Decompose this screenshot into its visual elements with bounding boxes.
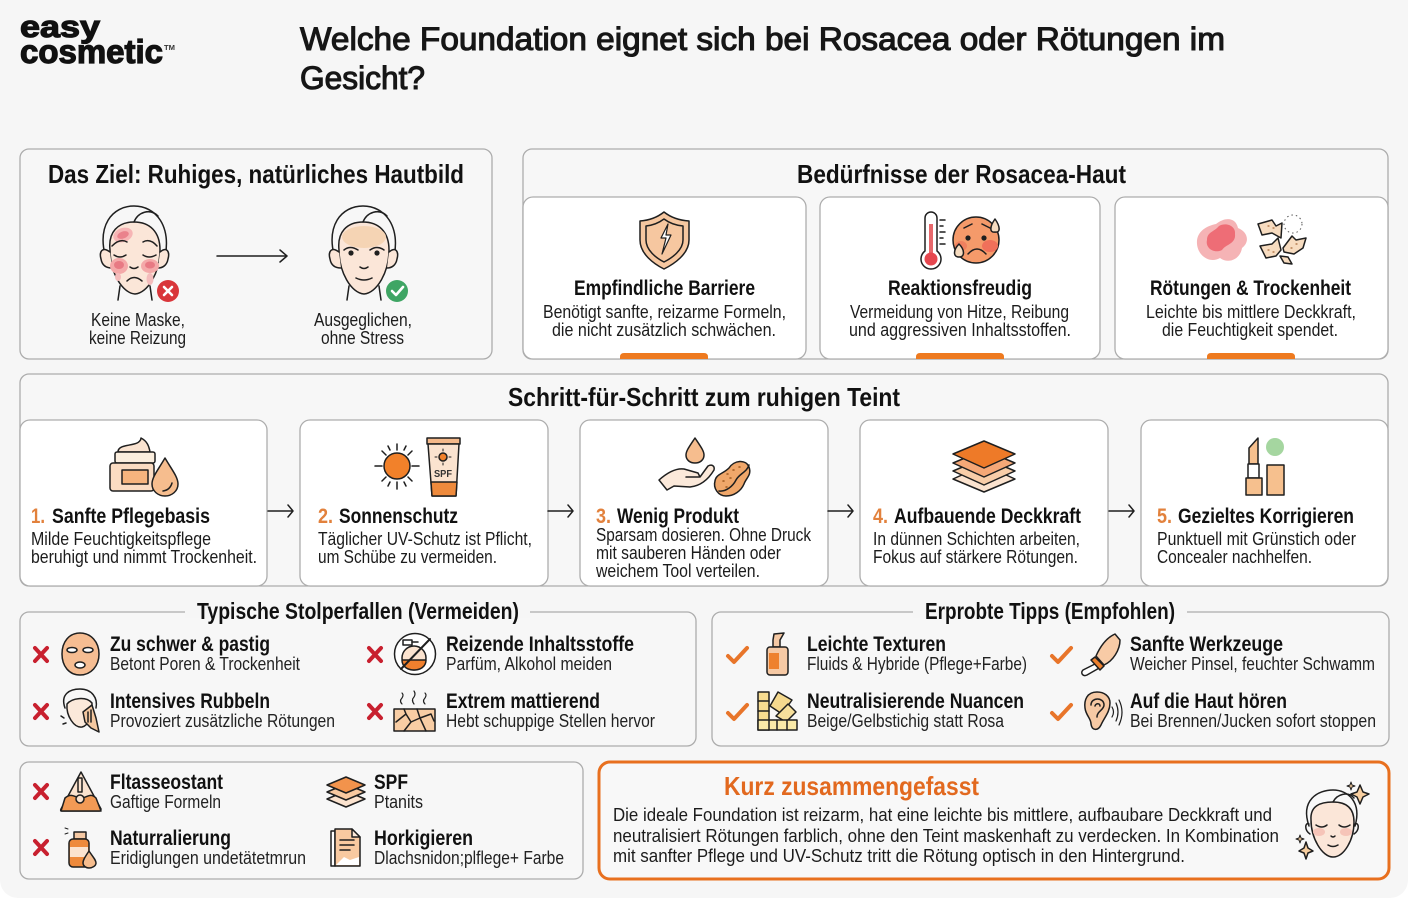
caption: no mask xyxy=(89,310,186,348)
step text: Sparsam dosieren. Ohne Druck xyxy=(596,525,812,545)
icon: concealer and green dot xyxy=(1246,438,1284,495)
card text: Benötigt sanfte, reizarme Formeln, xyxy=(543,302,786,322)
tip: listen to the skin xyxy=(1052,690,1376,731)
pitfall: too heavy: Zu schwer & pastig xyxy=(110,633,270,656)
icon: calm face xyxy=(329,206,398,300)
step text: Täglicher UV-Schutz ist Pflicht, xyxy=(318,529,532,549)
step text: Punktuell mit Grünstich oder xyxy=(1157,529,1356,549)
pitfall: too heavy xyxy=(35,633,300,675)
icon: flushed sweating face xyxy=(953,217,999,263)
tip: light textures: Fluids & Hybride (Pflege+Farbe) xyxy=(807,654,1027,674)
card text: Vermeidung von Hitze, Reibung xyxy=(850,302,1069,322)
card: sensitive barrier xyxy=(523,197,806,359)
step text: Fokus auf stärkere Rötungen. xyxy=(873,547,1078,567)
pitfall: too heavy: Betont Poren & Trockenheit xyxy=(110,654,300,674)
card: step 4 xyxy=(860,420,1108,586)
step text: 4. xyxy=(873,505,888,528)
step text: weichem Tool verteilen. xyxy=(595,561,760,581)
step text: Wenig Produkt xyxy=(617,505,739,528)
item: naturalising: Eridiglungen undetätetmrun xyxy=(110,848,306,868)
item: document: Dlachsnidon;plflege+ Farbe xyxy=(374,848,564,868)
step text: Sonnenschutz xyxy=(339,505,458,528)
card text: Reaktionsfreudig xyxy=(888,277,1032,300)
item: SPF layers xyxy=(327,771,423,812)
title xyxy=(300,21,1225,96)
card text xyxy=(849,277,1071,340)
step text: Sanfte Pflegebasis xyxy=(52,505,210,528)
step text xyxy=(318,505,532,567)
arrow: step 2 to 3 xyxy=(548,505,573,517)
pitfall: extreme matte: Extrem mattierend xyxy=(446,690,600,713)
tip: listen to the skin: Auf die Haut hören xyxy=(1130,690,1287,713)
logo: easy cosmetic xyxy=(20,9,175,70)
pitfall: extreme matte: Hebt schuppige Stellen hervor xyxy=(446,711,655,731)
icon: thermometer xyxy=(921,212,945,269)
card text: die Feuchtigkeit spendet. xyxy=(1162,320,1338,340)
arrow: step 3 to 4 xyxy=(828,505,853,517)
logo: easy cosmetic: easy xyxy=(20,9,101,44)
step text: 1. xyxy=(31,505,45,528)
card: step 2 xyxy=(300,420,548,586)
tip: neutralising shades xyxy=(728,690,1024,731)
pitfall: irritating ingredients: Parfüm, Alkohol meiden xyxy=(446,654,612,674)
card: redness and dryness xyxy=(1115,197,1388,359)
step text xyxy=(873,505,1081,567)
heading: goal: Das Ziel: Ruhiges, natürliches Hautbild xyxy=(48,159,464,189)
step text: um Schübe zu vermeiden. xyxy=(318,547,497,567)
card: step 5 xyxy=(1141,420,1388,586)
summary text xyxy=(613,805,1279,866)
step text xyxy=(1157,505,1356,567)
pitfall: rubbing: Provoziert zusätzliche Rötungen xyxy=(110,711,335,731)
icon: drop above hand xyxy=(659,438,714,490)
icon: sun xyxy=(375,444,419,489)
heading: summary: Kurz zusammengefasst xyxy=(724,771,979,801)
arrow: before to after xyxy=(217,250,287,262)
tip: listen to the skin: Bei Brennen/Jucken sofort stoppen xyxy=(1130,711,1376,731)
step text: Aufbauende Deckkraft xyxy=(894,505,1081,528)
icon: redness patch xyxy=(1197,219,1247,261)
panel: needs of rosacea skin xyxy=(523,149,1388,359)
item: document xyxy=(331,827,564,868)
icon: green check badge xyxy=(386,280,408,302)
summary text: neutralisiert Rötungen farblich, ohne den Teint maskenhaft zu verdecken. In Kombination xyxy=(613,826,1279,846)
heading: steps: Schritt-für-Schritt zum ruhigen Teint xyxy=(508,382,900,412)
item: naturalising: Naturralierung xyxy=(110,827,231,850)
caption: balanced: Ausgeglichen, xyxy=(314,310,412,330)
icon: irritated face xyxy=(100,206,169,300)
panel: summary xyxy=(599,762,1389,879)
item: document: Horkigieren xyxy=(374,827,473,850)
title: Welche Foundation eignet sich bei Rosacea oder Rötungen im xyxy=(300,21,1225,57)
icon: red cross badge xyxy=(157,280,179,302)
title: Gesicht? xyxy=(300,60,425,96)
card text xyxy=(543,277,786,340)
item: SPF layers: SPF xyxy=(374,771,408,794)
card: step 1 xyxy=(20,420,267,586)
step text: 5. xyxy=(1157,505,1172,528)
item: warning formula: Fltasseostant xyxy=(110,771,223,794)
step text: In dünnen Schichten arbeiten, xyxy=(873,529,1080,549)
panel: tips xyxy=(712,598,1389,746)
caption: balanced xyxy=(314,310,412,348)
pitfall: irritating ingredients: Reizende Inhaltsstoffe xyxy=(446,633,634,656)
step text: Milde Feuchtigkeitspflege xyxy=(31,529,211,549)
tip: light textures: Leichte Texturen xyxy=(807,633,946,656)
step text: 2. xyxy=(318,505,333,528)
summary text: Die ideale Foundation ist reizarm, hat eine leichte bis mittlere, aufbaubare Deckkraft und xyxy=(613,805,1272,825)
panel: goal xyxy=(20,149,492,359)
step text: Concealer nachhelfen. xyxy=(1157,547,1312,567)
caption: balanced: ohne Stress xyxy=(321,328,404,348)
icon: sponge xyxy=(715,461,750,496)
item: warning formula: Gaftige Formeln xyxy=(110,792,221,812)
caption: no mask: Keine Maske, xyxy=(91,310,185,330)
arrow: step 1 to 2 xyxy=(268,505,293,517)
logo: easy cosmetic: cosmetic xyxy=(20,33,163,70)
step text: mit sauberen Händen oder xyxy=(596,543,781,563)
pitfall: extreme matte xyxy=(369,690,655,731)
tip: gentle tools: Weicher Pinsel, feuchter Schwamm xyxy=(1130,654,1375,674)
card text xyxy=(1146,277,1356,340)
step text xyxy=(595,505,812,581)
summary text: mit sanfter Pflege und UV-Schutz tritt die Rötung optisch in den Hintergrund. xyxy=(613,846,1185,866)
tip: neutralising shades: Neutralisierende Nuancen xyxy=(807,690,1024,713)
heading: tips: Erprobte Tipps (Empfohlen) xyxy=(925,598,1175,624)
item: naturalising xyxy=(35,827,306,868)
icon: cracked shield xyxy=(640,212,689,269)
pitfall: irritating ingredients xyxy=(369,633,634,674)
caption: no mask: keine Reizung xyxy=(89,328,186,348)
pitfall: rubbing xyxy=(35,689,335,732)
card text: und aggressiven Inhaltsstoffen. xyxy=(849,320,1071,340)
card text: Rötungen & Trockenheit xyxy=(1150,277,1351,300)
panel: pitfalls xyxy=(20,598,696,746)
step text: Gezieltes Korrigieren xyxy=(1178,505,1354,528)
card: step 3 xyxy=(580,420,828,586)
step text: beruhigt und nimmt Trockenheit. xyxy=(31,547,257,567)
card text: die nicht zusätzlich schwächen. xyxy=(552,320,776,340)
tip: gentle tools xyxy=(1052,633,1375,676)
tip: neutralising shades: Beige/Gelbstichig statt Rosa xyxy=(807,711,1005,731)
card: reactive xyxy=(820,197,1100,359)
step text: 3. xyxy=(596,505,611,528)
icon: SPF tube xyxy=(427,438,460,496)
panel: extra items xyxy=(20,762,583,879)
icon: dry skin flakes xyxy=(1258,215,1306,264)
icon: cream jar with drop xyxy=(110,438,178,496)
card text: Leichte bis mittlere Deckkraft, xyxy=(1146,302,1356,322)
tip: light textures xyxy=(728,633,1027,675)
icon: stacked layers xyxy=(953,441,1015,492)
tip: gentle tools: Sanfte Werkzeuge xyxy=(1130,633,1283,656)
panel: step by step xyxy=(20,374,1388,586)
item: SPF layers: Ptanits xyxy=(374,792,423,812)
heading: pitfalls: Typische Stolperfallen (Vermeiden) xyxy=(197,598,519,624)
card text: Empfindliche Barriere xyxy=(574,277,755,300)
icon: relaxed face with sparkles xyxy=(1296,782,1369,859)
pitfall: rubbing: Intensives Rubbeln xyxy=(110,690,270,713)
arrow: step 4 to 5 xyxy=(1109,505,1134,517)
step text xyxy=(31,505,257,567)
icon: SPF tube: SPF xyxy=(434,469,452,480)
heading: needs: Bedürfnisse der Rosacea-Haut xyxy=(797,159,1126,189)
logo: easy cosmetic: TM xyxy=(164,45,175,52)
item: warning formula xyxy=(35,771,223,812)
